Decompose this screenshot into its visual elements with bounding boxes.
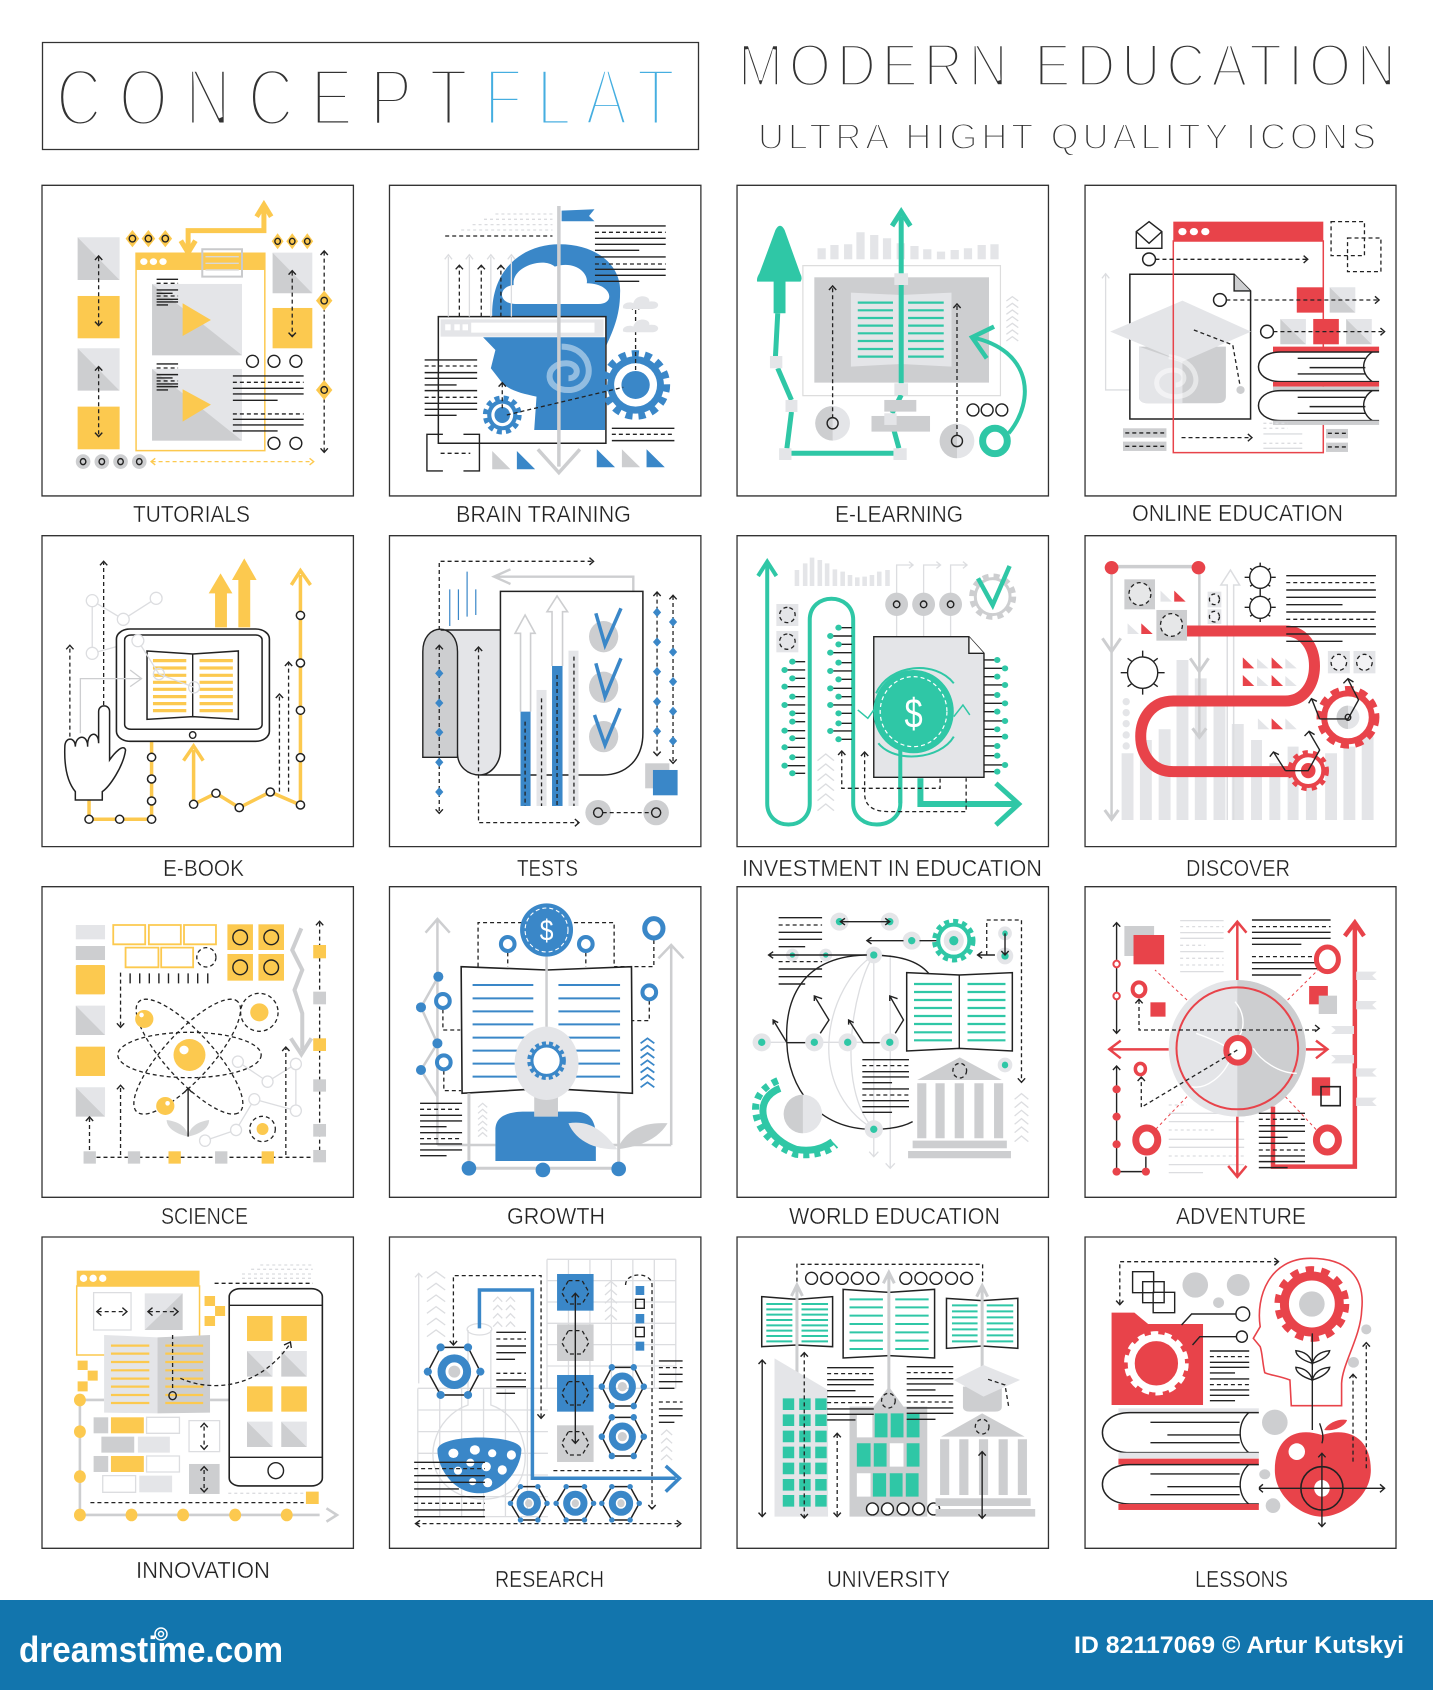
footer logo spiral: [155, 1628, 167, 1640]
heading: modern education: MODERN EDUCATION: [738, 32, 1396, 100]
label: tutorials: TUTORIALS: [133, 501, 250, 527]
teal half gear: [756, 1081, 836, 1155]
top arrows: [439, 558, 633, 630]
gray frame: [80, 1400, 337, 1522]
red dots: [1105, 561, 1205, 574]
panel: science: [42, 887, 353, 1197]
gear with check: [972, 566, 1014, 617]
gears: [1270, 679, 1375, 789]
left black route: [1113, 923, 1146, 1172]
label: adventure: ADVENTURE: [1176, 1203, 1306, 1229]
book stack: [1258, 347, 1379, 425]
title box: concept flat: FLAT: [484, 53, 675, 143]
thick route: [1273, 923, 1364, 1167]
output arrow: [920, 778, 1019, 825]
dashed arrows: [86, 973, 289, 1155]
coin: [520, 903, 573, 957]
disks: [753, 913, 1013, 1138]
checkers: [78, 1296, 319, 1504]
document with coin: [858, 637, 984, 803]
route nodes: [85, 611, 305, 823]
panel: e-book: [42, 536, 353, 847]
outlined rects: [113, 925, 216, 967]
tablet with book: [116, 629, 269, 741]
head icon: [438, 244, 620, 443]
blue dots bottom: [462, 1161, 626, 1177]
dashed arrow top: [1116, 1258, 1278, 1305]
panel: world education: [737, 887, 1048, 1197]
light nodes: [86, 592, 162, 659]
document with cap: [1110, 274, 1251, 419]
panel: online education: [1085, 185, 1396, 496]
three open books: [762, 1289, 1018, 1358]
bracket and triangles: [427, 434, 665, 471]
graduation cap: [954, 1365, 1020, 1412]
bank: [908, 1057, 1011, 1158]
panel: adventure: [1085, 887, 1396, 1197]
book: [104, 1335, 210, 1413]
yellow dots: [74, 1394, 293, 1521]
small gear: [485, 398, 519, 432]
dots: [1123, 698, 1130, 750]
text blocks: [1252, 920, 1331, 1168]
text lines and circles: [233, 355, 304, 449]
left tiles: [78, 237, 120, 449]
dashed squares: [1331, 222, 1381, 272]
panel: tutorials: [42, 185, 353, 496]
head with gear: [1253, 1258, 1362, 1430]
book stack: [1102, 1408, 1259, 1510]
right column: [84, 921, 326, 1164]
dashed connectors: [838, 751, 966, 812]
text block: [1286, 576, 1376, 641]
footer bar: [0, 1600, 1433, 1690]
envelope: [1136, 222, 1162, 248]
curved teal arrow: [972, 327, 1025, 454]
light text lines: [1169, 921, 1244, 1173]
title box: concept flat: [42, 42, 698, 150]
text block top: [779, 918, 822, 984]
dashed rect: [443, 923, 654, 1091]
ticks: [130, 948, 216, 983]
text blocks: [827, 1367, 953, 1420]
label: growth: GROWTH: [507, 1203, 605, 1229]
disks: [585, 800, 669, 825]
hand: [65, 706, 126, 800]
dashed route: [987, 920, 1025, 1082]
background bars: [1122, 660, 1374, 820]
open book: [907, 973, 1012, 1051]
big gear: [605, 354, 667, 416]
dashed arrows: [1349, 1343, 1370, 1468]
yellow window: [77, 1271, 200, 1355]
yellow arrow: [181, 205, 271, 253]
flag pole: [538, 206, 594, 473]
flags: [1331, 972, 1377, 1106]
teal route: [758, 562, 900, 825]
scroll: [423, 591, 643, 775]
panel: discover: [1085, 536, 1396, 847]
frame: [469, 1093, 619, 1168]
gray arrows: [445, 255, 515, 317]
stand and disks: [815, 286, 1008, 458]
title box: concept flat: CONCEPT: [56, 53, 468, 143]
blue dots left: [416, 972, 443, 1075]
panel: innovation: [42, 1237, 353, 1548]
gray thin arrow: [1102, 274, 1130, 390]
dotted lines: [445, 214, 552, 236]
panel: university: [737, 1237, 1048, 1548]
monitor with book: [803, 266, 1000, 396]
panel: e-learning: [737, 185, 1048, 496]
red diagonals: [1155, 968, 1320, 1133]
text blocks: [425, 226, 674, 441]
video window: [136, 249, 265, 451]
bar chart: [515, 596, 579, 806]
connector rows: [1143, 253, 1385, 344]
panel: brain training: [389, 185, 701, 496]
leaves: [568, 1123, 668, 1149]
label: discover: DISCOVER: [1186, 855, 1290, 881]
yellow tiles: [227, 924, 284, 981]
subheading: ultra hight quality icons: ULTRA HIGHT QUALITY ICONS: [758, 116, 1376, 157]
flask: [433, 1324, 525, 1499]
teal arrow route: [757, 212, 910, 460]
open book: [461, 957, 632, 1093]
dashed connectors: [1135, 999, 1319, 1107]
text block mid: [862, 1060, 909, 1112]
zigzag arrow: [291, 928, 311, 1054]
chevrons: [1006, 297, 1018, 341]
chevrons: [818, 754, 834, 811]
connectors and clouds: [499, 296, 658, 415]
chevrons: [478, 1038, 654, 1137]
squares: [557, 1274, 594, 1462]
blue route: [479, 1290, 679, 1492]
tiles: [1124, 579, 1375, 673]
phone: [229, 1289, 322, 1486]
block rows: [94, 1417, 220, 1494]
bottom nodes: [76, 454, 314, 469]
folder with gear: [1112, 1307, 1250, 1405]
red dots: [1112, 961, 1150, 1176]
red path: [1141, 631, 1314, 772]
gray arrows: [791, 1272, 988, 1390]
bottom rows: [1123, 423, 1348, 452]
gear: [935, 921, 973, 960]
chevrons: [415, 1272, 672, 1460]
right tiles: [273, 251, 332, 452]
checks: [589, 608, 621, 752]
panel: growth: [389, 887, 701, 1197]
bar chart: [795, 558, 890, 586]
overlapped squares: [1133, 1272, 1175, 1313]
label: university: UNIVERSITY: [827, 1566, 950, 1592]
label: world education: WORLD EDUCATION: [789, 1203, 1000, 1229]
right columns: [645, 592, 678, 795]
gray arrows: [421, 919, 684, 1145]
rings: [1133, 947, 1338, 1152]
globe: [762, 955, 929, 1168]
chevrons: [1015, 1094, 1028, 1142]
footer logo text: dreamstime.com: [19, 1629, 283, 1670]
atom: [116, 990, 278, 1142]
gray frame: [1102, 567, 1209, 819]
apple: [1258, 1420, 1385, 1527]
diamonds column: [435, 645, 579, 826]
label: science: SCIENCE: [161, 1203, 248, 1229]
molecule hexagons: [424, 1343, 647, 1523]
document with coin: $: [904, 689, 923, 736]
network: [92, 598, 194, 687]
bank: [936, 1413, 1035, 1518]
middle building: [850, 1387, 940, 1517]
thin arrows and disks: [885, 562, 967, 637]
dashed top and circles: [797, 1264, 983, 1284]
rings: [436, 919, 663, 1069]
label: tests: TESTS: [517, 855, 578, 881]
yellow arrows: [89, 558, 310, 819]
coin: $: [540, 913, 553, 947]
label: investment in education: INVESTMENT IN EDUCATION: [742, 855, 1042, 881]
left swatches: [76, 925, 105, 1117]
gray dots: [1182, 1272, 1371, 1513]
plant: [167, 1088, 209, 1137]
squares: [1124, 926, 1340, 1106]
panel: lessons: [1085, 1237, 1396, 1548]
circuit combs: [781, 625, 1008, 776]
footer credit: ID 82117069 © Artur Kutskyi: [1074, 1632, 1404, 1659]
label: innovation: INNOVATION: [136, 1557, 270, 1583]
person with gear: [495, 1027, 596, 1161]
text blocks: [414, 1332, 683, 1517]
up arrow: [1221, 570, 1240, 820]
bar chart: [818, 232, 999, 259]
label: brain training: BRAIN TRAINING: [456, 501, 631, 527]
dashed routes: [416, 1275, 681, 1527]
label: research: RESEARCH: [495, 1566, 604, 1592]
dotted lines: [90, 1265, 313, 1503]
sun icons: [1121, 563, 1276, 695]
label: online education: ONLINE EDUCATION: [1132, 500, 1343, 526]
dial: [1169, 980, 1306, 1117]
checklist: [636, 1286, 644, 1351]
black arrows: [769, 918, 1009, 1043]
red window: [1173, 222, 1323, 453]
triangles: [1128, 591, 1297, 729]
panel: investment in education: [737, 536, 1048, 847]
dashed curve: [169, 1335, 291, 1400]
red arrows: [1109, 922, 1327, 1177]
panel: tests: [389, 536, 701, 847]
top nodes: [126, 230, 313, 249]
label: e-book: E-BOOK: [163, 855, 245, 881]
panel: research: [389, 1237, 701, 1548]
left building: [759, 1353, 841, 1518]
text block: [1210, 1351, 1249, 1401]
network: [200, 1056, 301, 1146]
gray arrow: [80, 670, 142, 733]
small dashed tiles: [776, 604, 798, 652]
label: lessons: LESSONS: [1195, 1566, 1288, 1592]
grid: [418, 1259, 676, 1517]
dashed arrows: [66, 561, 292, 792]
label: e-learning: E-LEARNING: [835, 501, 963, 527]
text block: [420, 1103, 462, 1156]
